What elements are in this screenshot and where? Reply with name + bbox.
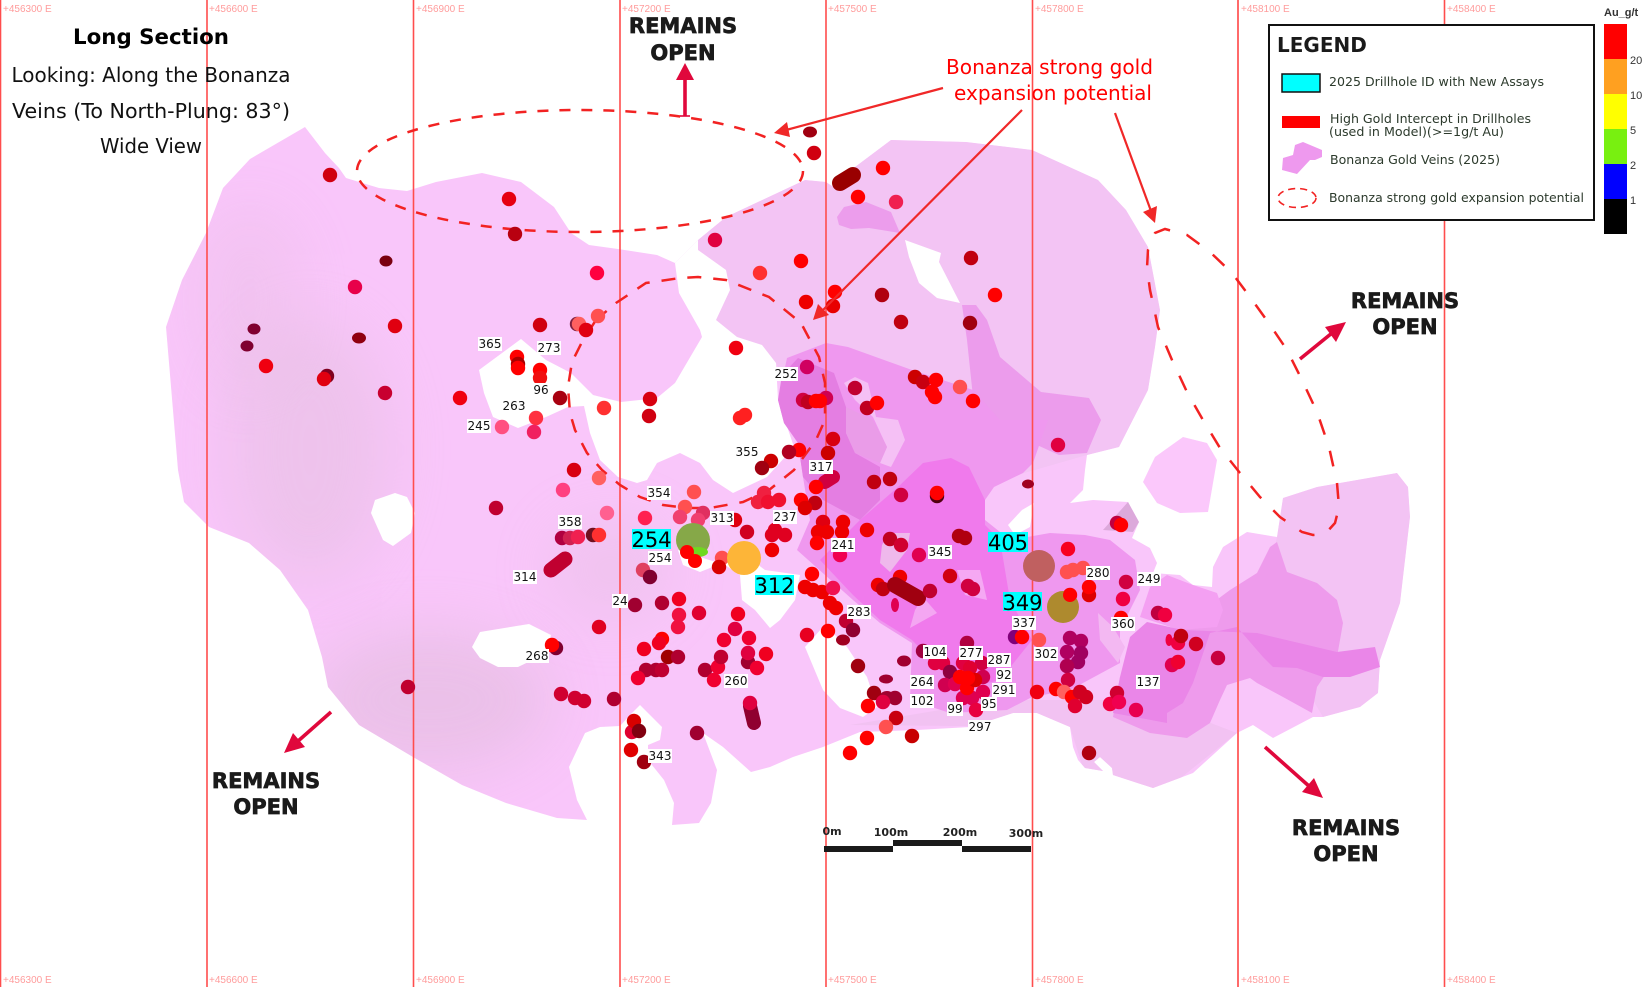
label: remains open lower left: REMAINS (212, 769, 320, 793)
legend item: high gold intercept (1282, 112, 1531, 139)
grid lines and easting labels: +457200 E (622, 975, 671, 986)
label: remains open lower right: REMAINS (1292, 816, 1400, 840)
scale bar: 200m (943, 826, 977, 839)
drillhole ID labels: 99 (947, 702, 963, 716)
label: remains open top: REMAINS (629, 14, 737, 38)
drillhole ID labels: 283 (848, 605, 870, 619)
olive circle: hole 349 (1047, 591, 1079, 623)
label: remains open right: REMAINS (1351, 289, 1459, 313)
title block (12, 25, 290, 158)
new assay drillhole circles (676, 523, 1079, 623)
title block: Veins (To North-Plung: 83°) (12, 99, 290, 123)
green circle: hole 254 (676, 523, 710, 557)
scale bar (822, 825, 1043, 852)
drillhole ID labels: 313 (711, 511, 733, 525)
legend item: high gold intercept: (used in Model)(>=1g/t Au) (1329, 125, 1504, 139)
drillhole ID labels: 92 (996, 668, 1012, 682)
title block: Long Section (73, 25, 229, 49)
drillhole ID labels: 237 (774, 510, 796, 524)
drillhole ID labels: 102 (911, 694, 933, 708)
grid lines and easting labels: +458100 E (1241, 4, 1290, 15)
arrow: remains open up (676, 63, 694, 116)
gold grade colour bar: 2 (1630, 160, 1636, 172)
drillhole ID labels: 264 (911, 675, 933, 689)
gold grade colour bar: 1 (1630, 195, 1636, 207)
drillhole ID labels: 249 (1138, 572, 1160, 586)
callout arrows (774, 88, 1157, 320)
grid lines and easting labels: +458400 E (1447, 4, 1496, 15)
callout: Bonanza strong gold expansion potential (774, 55, 1157, 320)
title block: Wide View (100, 134, 202, 158)
legend item: expansion potential: Bonanza strong gold expansion potential (1329, 191, 1584, 205)
legend (1269, 25, 1594, 220)
scale bar: 0m (822, 825, 842, 838)
drillhole ID labels: 241 (832, 538, 854, 552)
drillhole ID labels: 365 (479, 337, 501, 351)
drillhole ID labels: 302 (1035, 647, 1057, 661)
label: remains open right: OPEN (1372, 315, 1438, 339)
drillhole ID labels: 280 (1087, 566, 1109, 580)
gold grade colour bar: 10 (1630, 90, 1642, 102)
label: remains open lower right: OPEN (1313, 842, 1379, 866)
callout: Bonanza strong gold expansion potential: expansion potential (954, 81, 1152, 105)
grid lines and easting labels: +458400 E (1447, 975, 1496, 986)
drillhole ID labels: 360 (1112, 617, 1134, 631)
drillhole ID labels (467, 337, 1161, 763)
drillhole ID labels: 317 (810, 460, 832, 474)
grid lines and easting labels: +457800 E (1035, 975, 1084, 986)
drillhole ID labels: 96 (533, 383, 549, 397)
callout: Bonanza strong gold expansion potential: Bonanza strong gold (946, 55, 1153, 79)
2025 drillhole ID labels (cyan): 254 (631, 528, 672, 552)
legend heading: LEGEND (1277, 33, 1367, 57)
drillhole ID labels: 260 (725, 674, 747, 688)
white gaps in vein model (371, 240, 1034, 717)
drillhole ID labels: 337 (1013, 616, 1035, 630)
drillhole ID labels: 263 (503, 399, 525, 413)
2025 drillhole ID labels (cyan): 349 (1002, 591, 1043, 615)
legend item: drillhole ID (1282, 74, 1544, 92)
drillhole ID labels: 354 (648, 486, 670, 500)
grid lines and easting labels: +456900 E (416, 975, 465, 986)
gold grade colour bar: 20 (1630, 55, 1642, 67)
drillhole ID labels: 277 (960, 646, 982, 660)
drillhole ID labels: 297 (969, 720, 991, 734)
drillhole ID labels: 268 (526, 649, 548, 663)
drillhole ID labels: 291 (993, 683, 1015, 697)
label: remains open top (629, 14, 737, 65)
drillhole ID labels: 245 (468, 419, 490, 433)
drillhole ID labels: 345 (929, 545, 951, 559)
scale bar: 100m (874, 826, 908, 839)
grid lines and easting labels: +457800 E (1035, 4, 1084, 15)
scale bar: 300m (1009, 827, 1043, 840)
grid lines and easting labels: +457500 E (828, 975, 877, 986)
label: remains open lower left: OPEN (233, 795, 299, 819)
label: remains open lower right (1292, 816, 1400, 866)
grid lines and easting labels: +456600 E (209, 975, 258, 986)
grid lines and easting labels: +456900 E (416, 4, 465, 15)
label: remains open top: OPEN (650, 41, 716, 65)
legend item: expansion potential (1278, 188, 1584, 208)
gold grade colour bar: 5 (1630, 125, 1636, 137)
drillhole ID labels: 343 (649, 749, 671, 763)
legend item: drillhole ID: 2025 Drillhole ID with New Assays (1329, 75, 1544, 89)
legend item: high gold intercept: High Gold Intercept in Drillholes (1330, 112, 1531, 126)
grid lines and easting labels: +458100 E (1241, 975, 1290, 986)
drillhole ID labels: 137 (1137, 675, 1159, 689)
label: remains open lower left (212, 769, 320, 819)
2025 drillhole ID labels (cyan): 312 (754, 574, 795, 598)
2025 drillhole ID labels (cyan) (631, 528, 1043, 615)
2025 drillhole ID labels (cyan): 405 (988, 531, 1028, 555)
legend item: gold veins: Bonanza Gold Veins (2025) (1330, 153, 1500, 167)
drillhole ID labels: 254 (649, 551, 671, 565)
grid lines and easting labels: +457500 E (828, 4, 877, 15)
orange circle: hole 312 (727, 541, 761, 575)
vein base shape (150, 120, 1430, 840)
grid lines and easting labels: +457200 E (622, 4, 671, 15)
magenta vein overlays (778, 202, 1380, 738)
grid lines and easting labels: +456600 E (209, 4, 258, 15)
gold grade colour bar (1604, 7, 1642, 234)
drillhole ID labels: 314 (514, 570, 536, 584)
drillhole ID labels: 358 (559, 515, 581, 529)
drillhole ID labels: 355 (736, 445, 758, 459)
high gold intercept drillhole dots (240, 126, 1225, 769)
title block: Looking: Along the Bonanza (12, 63, 290, 87)
label: remains open right (1351, 289, 1459, 339)
arrow: remains open lower right (1265, 747, 1323, 798)
drillhole ID labels: 273 (538, 341, 560, 355)
grid lines and easting labels: +456300 E (3, 975, 52, 986)
drillhole ID labels: 95 (981, 697, 997, 711)
legend item: gold veins (1282, 142, 1500, 174)
grid lines and easting labels: +456300 E (3, 4, 52, 15)
panel: Bonanza gold veins model (150, 120, 1430, 840)
gold grade colour bar: Au_g/t (1604, 7, 1639, 19)
drillhole ID labels: 24 (612, 594, 628, 608)
drillhole ID labels: 287 (988, 653, 1010, 667)
brown circle: hole 405 (1023, 550, 1055, 582)
arrow: remains open lower left (284, 712, 331, 753)
dashed outlines: expansion potential zones (357, 110, 1339, 535)
arrow: remains open right (1300, 322, 1346, 359)
drillhole ID labels: 252 (775, 367, 797, 381)
drillhole ID labels: 104 (924, 645, 946, 659)
